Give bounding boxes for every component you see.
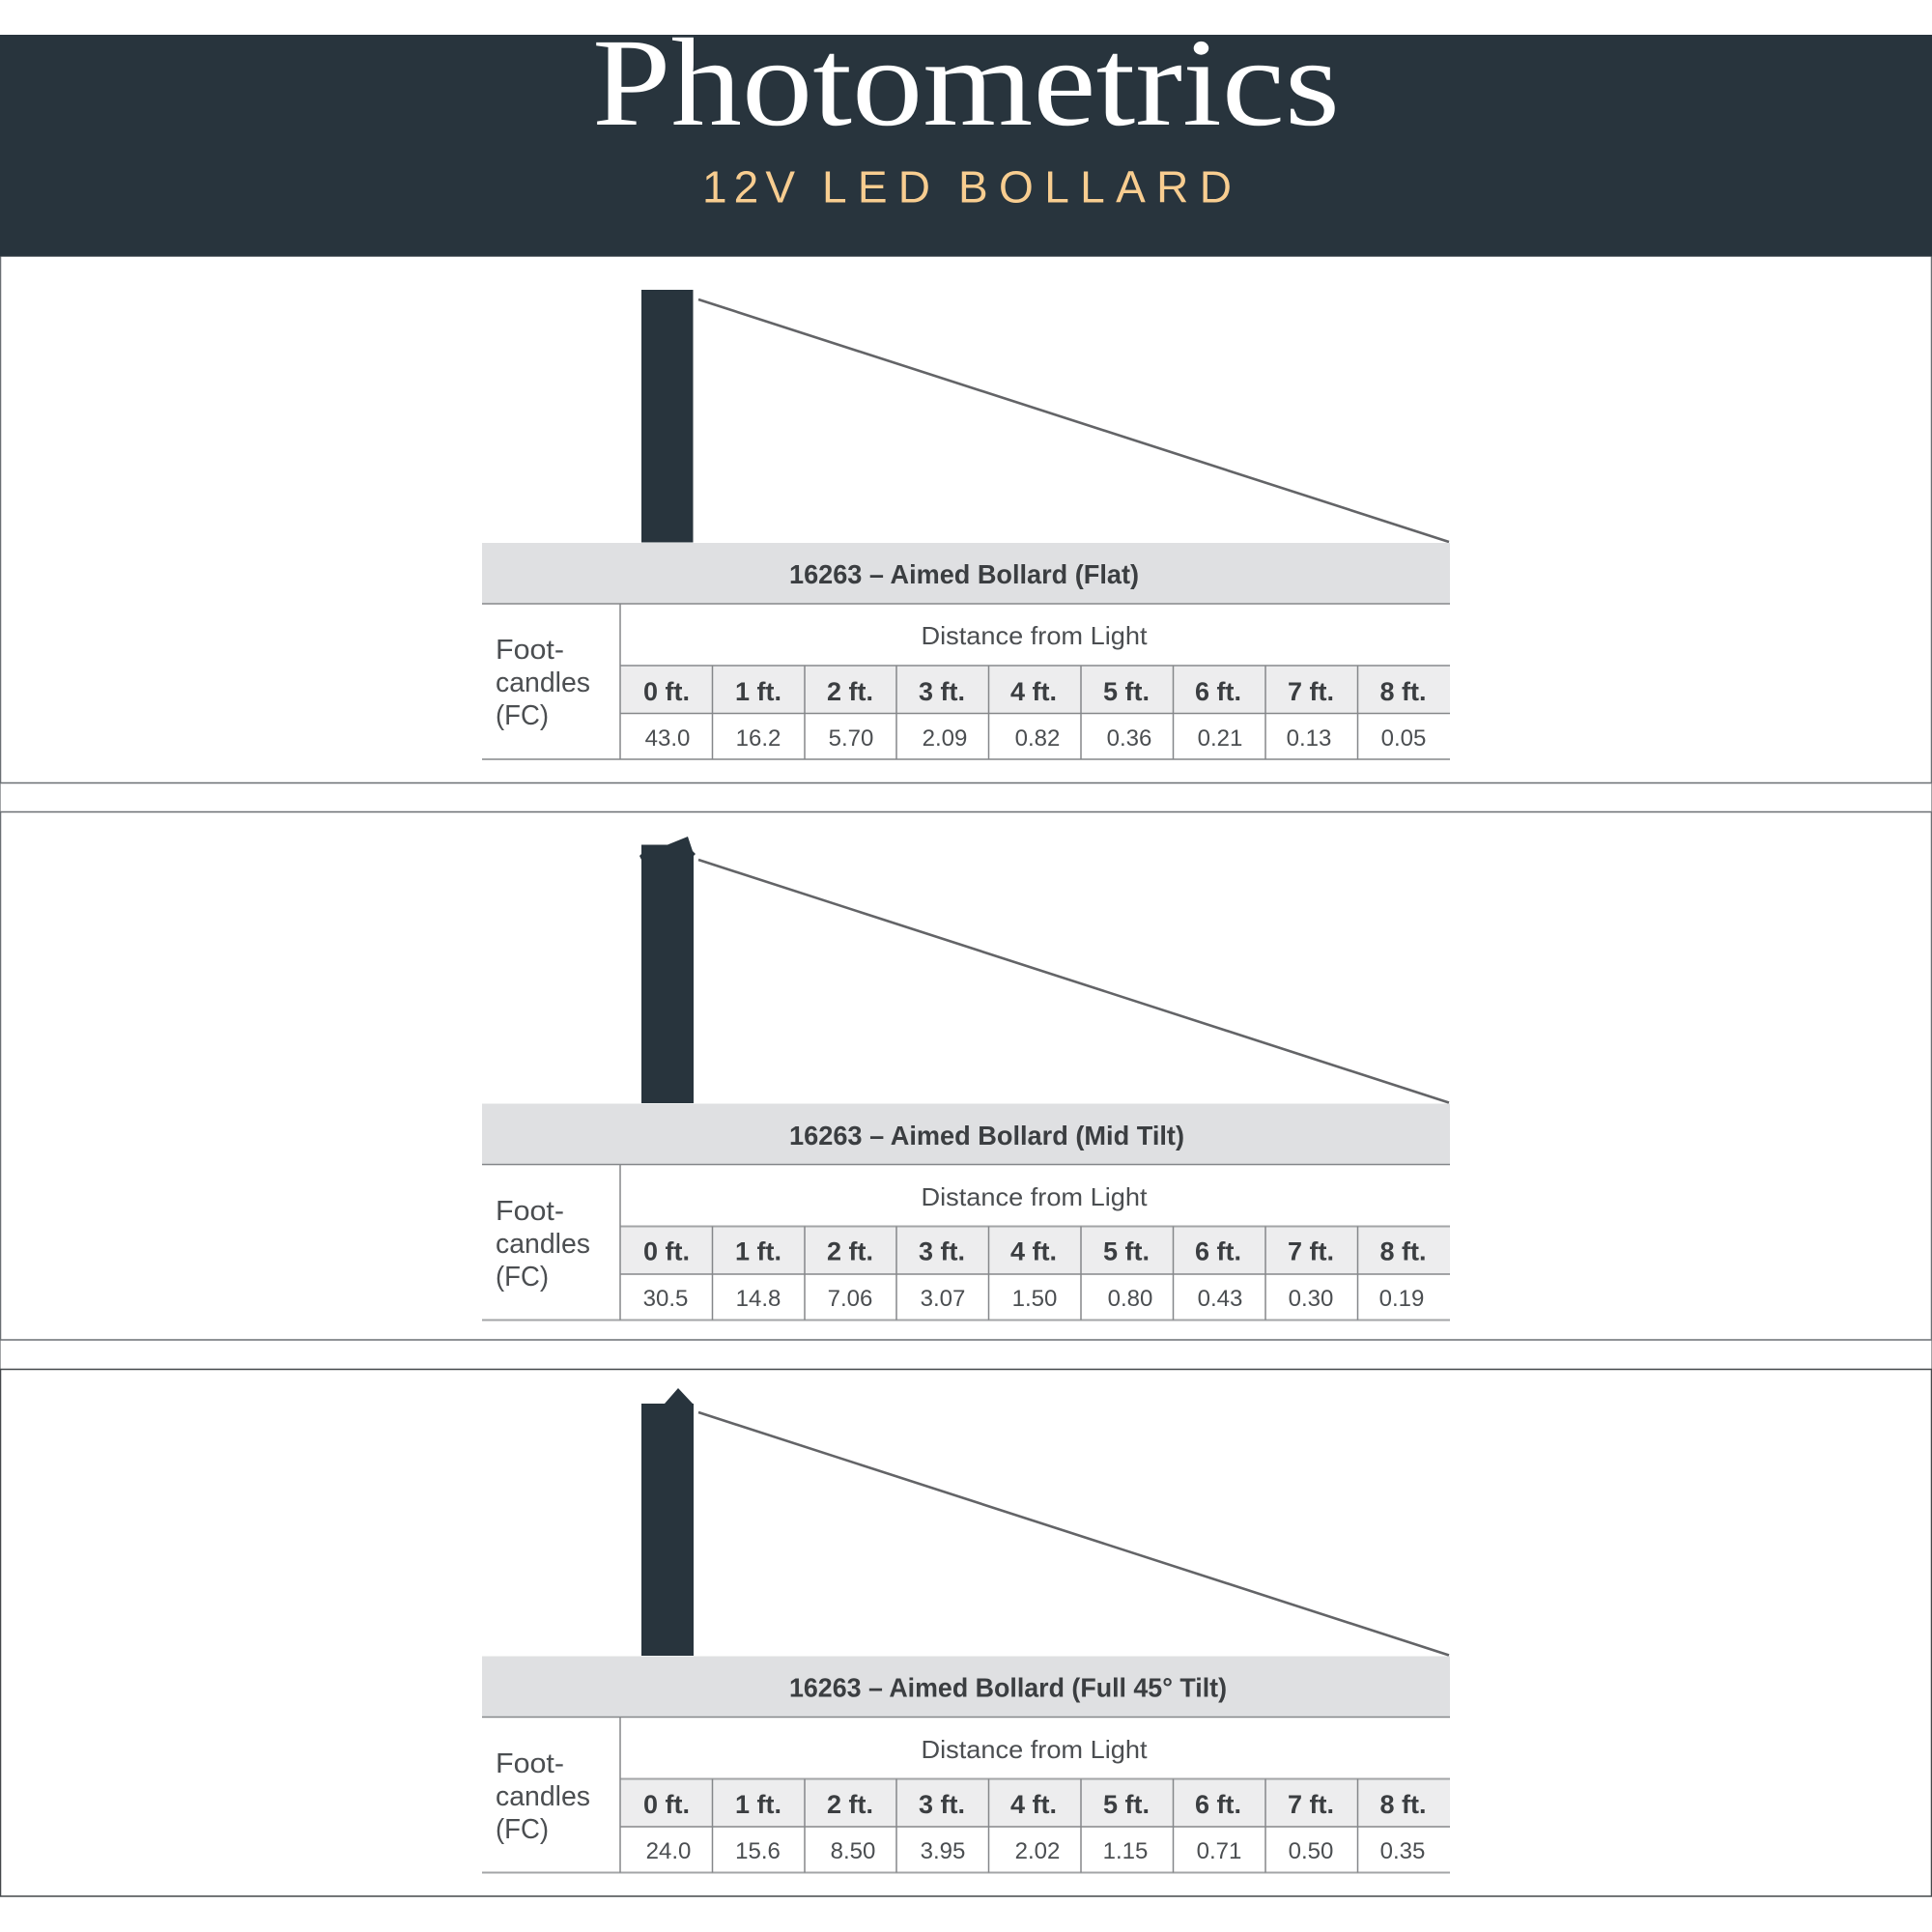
title: Photometrics bbox=[592, 14, 1340, 153]
foot-candle values: 1.15 bbox=[1103, 1838, 1148, 1864]
foot-candle values: 0.19 bbox=[1379, 1286, 1424, 1312]
distance headers: 2 ft. bbox=[827, 1236, 873, 1265]
foot-candle values: 0.36 bbox=[1107, 725, 1151, 752]
table title: 16263 – Aimed Bollard (Mid Tilt) bbox=[789, 1121, 1184, 1151]
distance headers: 8 ft. bbox=[1379, 1236, 1427, 1265]
distance headers: 6 ft. bbox=[1195, 1236, 1241, 1265]
distance headers: 5 ft. bbox=[1103, 677, 1150, 706]
distance headers: 3 ft. bbox=[919, 1236, 965, 1265]
distance headers: 2 ft. bbox=[827, 677, 873, 706]
foot-candle values: 0.35 bbox=[1380, 1838, 1425, 1864]
distance headers: 1 ft. bbox=[735, 1790, 781, 1819]
foot-candle values: 8.50 bbox=[831, 1838, 875, 1864]
foot-candle values: 5.70 bbox=[829, 725, 873, 752]
foot-candle values: 0.30 bbox=[1289, 1286, 1333, 1312]
table: flat aim bbox=[482, 543, 1450, 759]
foot-candle values: 30.5 bbox=[643, 1286, 688, 1312]
row label bbox=[496, 635, 590, 731]
distance headers: 8 ft. bbox=[1379, 1790, 1427, 1819]
row label bbox=[496, 1748, 590, 1845]
table: full tilt bbox=[482, 1656, 1450, 1872]
distance headers bbox=[643, 677, 1427, 706]
foot-candle values: 1.50 bbox=[1012, 1286, 1057, 1312]
distance headers: 7 ft. bbox=[1288, 1790, 1334, 1819]
distance headers bbox=[643, 1236, 1427, 1265]
subtitle: LED bbox=[822, 162, 930, 213]
distance headers: 7 ft. bbox=[1288, 677, 1334, 706]
distance headers: 6 ft. bbox=[1195, 1790, 1241, 1819]
header banner bbox=[0, 14, 1932, 257]
foot-candle values: 0.05 bbox=[1381, 725, 1426, 752]
distance heading: Distance from Light bbox=[922, 621, 1148, 650]
distance headers: 3 ft. bbox=[919, 677, 965, 706]
distance headers: 7 ft. bbox=[1288, 1236, 1334, 1265]
table title: 16263 – Aimed Bollard (Flat) bbox=[789, 559, 1139, 589]
subtitle bbox=[702, 162, 1232, 213]
foot-candle values: 2.09 bbox=[923, 725, 967, 752]
panel: full tilt bbox=[0, 1370, 1932, 1896]
row label: (FC) bbox=[496, 1262, 549, 1293]
light beam line bbox=[698, 299, 1449, 542]
foot-candle values: 3.07 bbox=[921, 1286, 965, 1312]
foot-candle values: 15.6 bbox=[735, 1838, 781, 1864]
distance headers bbox=[643, 1790, 1427, 1819]
foot-candle values: 2.02 bbox=[1015, 1838, 1060, 1864]
row label bbox=[496, 1196, 590, 1293]
distance headers: 2 ft. bbox=[827, 1790, 873, 1819]
icon: bollard full tilt bbox=[641, 1388, 694, 1656]
row label: candles bbox=[496, 1781, 590, 1812]
foot-candle values: 43.0 bbox=[645, 725, 690, 752]
foot-candle values: 24.0 bbox=[646, 1838, 691, 1864]
foot-candle values: 0.71 bbox=[1197, 1838, 1241, 1864]
light beam line bbox=[698, 1412, 1449, 1656]
table title: 16263 – Aimed Bollard (Full 45° Tilt) bbox=[789, 1673, 1227, 1702]
panel: mid tilt bbox=[0, 811, 1932, 1340]
row label: candles bbox=[496, 1229, 590, 1260]
distance headers: 5 ft. bbox=[1103, 1790, 1150, 1819]
foot-candle values: 0.13 bbox=[1287, 725, 1331, 752]
light beam line bbox=[698, 860, 1449, 1103]
row label: (FC) bbox=[496, 700, 549, 731]
row label: Foot- bbox=[496, 635, 564, 666]
distance heading: Distance from Light bbox=[922, 1182, 1148, 1211]
foot-candle values bbox=[643, 1286, 1424, 1312]
distance headers: 4 ft. bbox=[1010, 1236, 1057, 1265]
distance headers: 0 ft. bbox=[643, 1236, 690, 1265]
row label: (FC) bbox=[496, 1814, 549, 1845]
distance headers: 5 ft. bbox=[1103, 1236, 1150, 1265]
foot-candle values: 0.21 bbox=[1198, 725, 1242, 752]
foot-candle values: 0.82 bbox=[1015, 725, 1060, 752]
foot-candle values bbox=[646, 1838, 1425, 1864]
foot-candle values: 0.43 bbox=[1198, 1286, 1242, 1312]
distance headers: 1 ft. bbox=[735, 1236, 781, 1265]
distance headers: 4 ft. bbox=[1010, 1790, 1057, 1819]
distance heading: Distance from Light bbox=[922, 1735, 1148, 1764]
distance headers: 8 ft. bbox=[1379, 677, 1427, 706]
distance headers: 4 ft. bbox=[1010, 677, 1057, 706]
distance headers: 0 ft. bbox=[643, 677, 690, 706]
subtitle: BOLLARD bbox=[958, 162, 1232, 213]
table: mid tilt bbox=[482, 1103, 1450, 1320]
subtitle: 12V bbox=[702, 162, 795, 213]
distance headers: 1 ft. bbox=[735, 677, 781, 706]
foot-candle values: 0.50 bbox=[1289, 1838, 1333, 1864]
foot-candle values: 14.8 bbox=[736, 1286, 781, 1312]
row label: candles bbox=[496, 668, 590, 698]
row label: Foot- bbox=[496, 1196, 564, 1227]
distance headers: 6 ft. bbox=[1195, 677, 1241, 706]
foot-candle values: 7.06 bbox=[828, 1286, 872, 1312]
icon: bollard mid tilt bbox=[639, 837, 696, 1103]
icon: bollard flat bbox=[641, 290, 694, 543]
foot-candle values: 3.95 bbox=[921, 1838, 965, 1864]
distance headers: 3 ft. bbox=[919, 1790, 965, 1819]
panel: flat aim bbox=[0, 256, 1932, 782]
foot-candle values bbox=[645, 725, 1426, 752]
foot-candle values: 0.80 bbox=[1108, 1286, 1152, 1312]
row label: Foot- bbox=[496, 1748, 564, 1779]
distance headers: 0 ft. bbox=[643, 1790, 690, 1819]
foot-candle values: 16.2 bbox=[736, 725, 781, 752]
